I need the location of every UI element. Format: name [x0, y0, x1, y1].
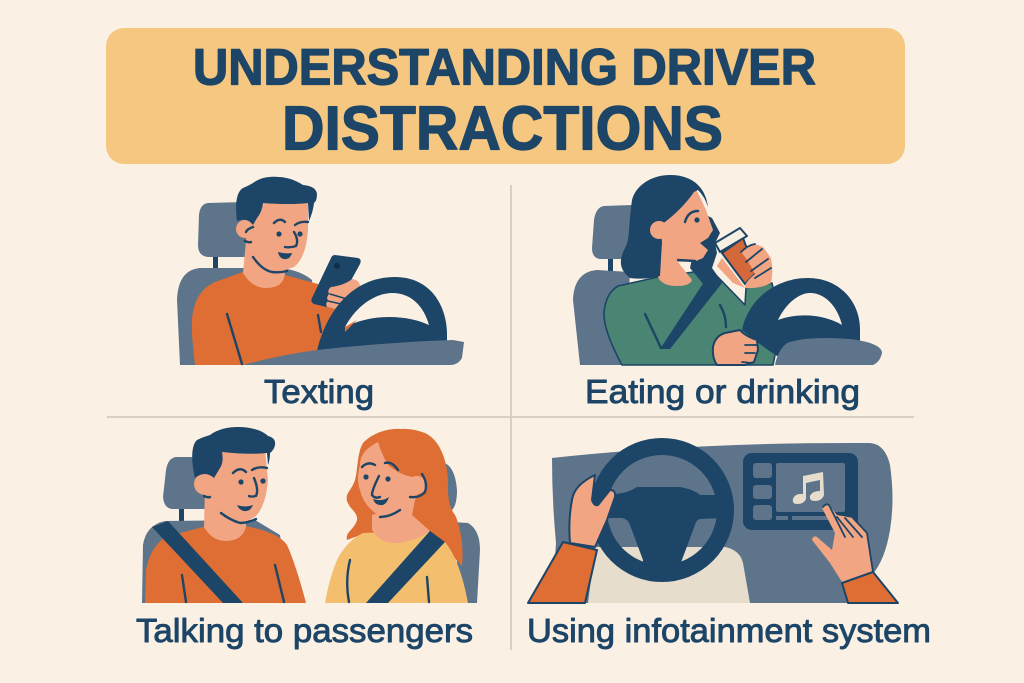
- icon: steering wheel: [317, 277, 447, 351]
- label: eating or drinking: Eating or drinking: [585, 373, 860, 410]
- icon: woman with dark hair: [604, 175, 781, 365]
- panel: using infotainment system: [528, 443, 898, 603]
- icon: steering wheel: [742, 278, 860, 356]
- icon: infotainment screen: [743, 453, 858, 530]
- icon: hand on wheel: [713, 330, 758, 365]
- icon: left hand and arm: [528, 475, 615, 603]
- panel: talking to passengers: [142, 427, 480, 603]
- icon: dashboard: [552, 443, 898, 603]
- icon: seat belt: [660, 273, 722, 349]
- icon: dashboard: [775, 338, 882, 365]
- icon: dashboard: [243, 340, 464, 365]
- icon: coffee cup in hand: [715, 228, 772, 288]
- icon: phone in hand: [311, 255, 361, 310]
- title banner: UNDERSTANDING DRIVER: [193, 38, 816, 96]
- label: texting: Texting: [264, 373, 374, 410]
- title banner: [106, 28, 905, 164]
- icon: man in orange shirt: [192, 177, 360, 365]
- label: using infotainment system: Using infotainment system: [527, 612, 931, 649]
- label: talking to passengers: Talking to passengers: [136, 612, 473, 649]
- icon: car seat: [177, 202, 320, 365]
- icon: car seat: [573, 205, 632, 365]
- icon: music note: [793, 472, 824, 504]
- title banner: DISTRACTIONS: [282, 94, 723, 164]
- icon: man with seat belt: [142, 427, 306, 603]
- panel: texting: [177, 177, 464, 365]
- icon: woman with red hair and seat belt: [325, 429, 480, 603]
- icon: steering wheel: [598, 446, 726, 575]
- panel: eating or drinking: [573, 175, 882, 365]
- icon: right hand and arm: [812, 504, 898, 603]
